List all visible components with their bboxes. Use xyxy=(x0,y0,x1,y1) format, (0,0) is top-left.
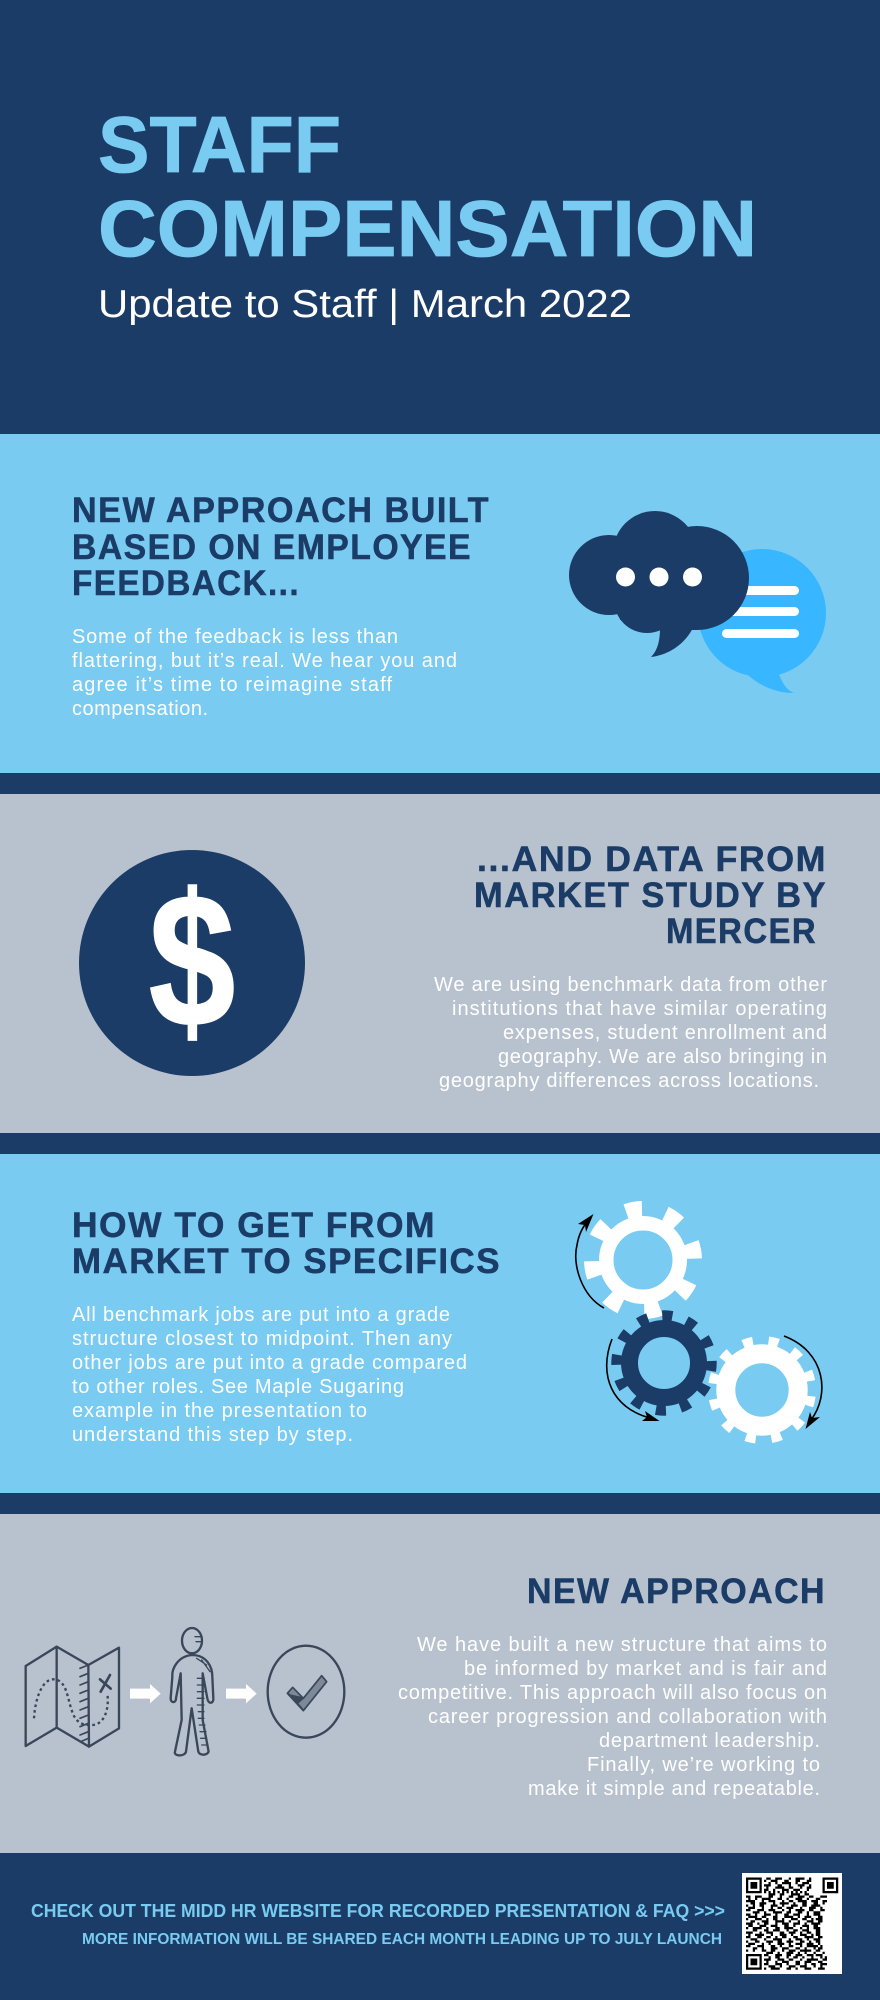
heading: new approach: NEW APPROACH xyxy=(527,1572,826,1611)
text block: new approach: career progression and collaboration with xyxy=(428,1706,827,1728)
subtitle: Update to Staff | March 2022 xyxy=(98,283,632,326)
dark cloud bubble xyxy=(569,511,749,657)
icon: person xyxy=(171,1628,213,1755)
icon: gears xyxy=(576,1195,822,1445)
text block: employee feedback: flattering, but it’s real. We hear you and xyxy=(72,650,457,672)
text block: new approach: department leadership. xyxy=(599,1730,820,1752)
text block: market data: expenses, student enrollment and xyxy=(503,1022,827,1044)
text block: market to specifics: All benchmark jobs are put into a grade xyxy=(72,1304,450,1326)
panel: new approach xyxy=(0,1514,880,1853)
text block: employee feedback: Some of the feedback is less than xyxy=(72,626,398,648)
header panel xyxy=(0,0,880,434)
title xyxy=(98,100,757,273)
title: STAFF xyxy=(98,100,341,189)
text block: market data xyxy=(434,974,827,1092)
heading: employee feedback: BASED ON EMPLOYEE xyxy=(72,528,472,567)
heading: employee feedback: NEW APPROACH BUILT xyxy=(72,491,490,530)
QR code xyxy=(742,1873,842,1974)
footer panel xyxy=(0,1853,880,2000)
text block: market data: geography. We are also bringing in xyxy=(498,1046,827,1068)
text block: employee feedback: compensation. xyxy=(72,698,208,720)
icon: dollar circle: $ xyxy=(149,854,235,1066)
heading: market to specifics xyxy=(72,1206,501,1281)
text block: market to specifics: structure closest to midpoint. Then any xyxy=(72,1328,452,1350)
rotation arrow: top gear xyxy=(576,1214,604,1308)
panel: employee feedback xyxy=(0,434,880,773)
light speech bubble xyxy=(698,549,826,693)
icon: check circle xyxy=(268,1646,344,1738)
rotation arrow: lower gear xyxy=(784,1336,822,1429)
footer call to action: CHECK OUT THE MIDD HR WEBSITE FOR RECORDED PRESENTATION & FAQ >>> xyxy=(31,1901,725,1921)
text block: new approach: Finally, we’re working to xyxy=(587,1754,820,1776)
text block: market data: institutions that have similar operating xyxy=(452,998,827,1020)
navy gear xyxy=(615,1314,713,1412)
footer note: MORE INFORMATION WILL BE SHARED EACH MONTH LEADING UP TO JULY LAUNCH xyxy=(82,1931,722,1948)
arrow: map to person xyxy=(130,1684,161,1703)
heading: market to specifics: HOW TO GET FROM xyxy=(72,1206,436,1245)
bubble text lines xyxy=(700,586,799,638)
heading: market data: MARKET STUDY BY xyxy=(474,876,827,915)
heading: market to specifics: MARKET TO SPECIFICS xyxy=(72,1242,501,1281)
heading: employee feedback xyxy=(72,491,490,603)
heading: market data: ...AND DATA FROM xyxy=(477,840,827,879)
text block: market data: We are using benchmark data from other xyxy=(434,974,827,996)
rotation arrow: navy gear xyxy=(607,1339,660,1421)
text block: market to specifics: example in the presentation to xyxy=(72,1400,367,1422)
text block: market to specifics xyxy=(72,1304,467,1446)
icon: map xyxy=(26,1647,119,1747)
icon: dollar circle xyxy=(79,850,305,1076)
text block: market to specifics: understand this step by step. xyxy=(72,1424,353,1446)
text block: new approach: competitive. This approach will also focus on xyxy=(398,1682,827,1704)
text block: new approach: We have built a new structure that aims to xyxy=(417,1634,827,1656)
text block: market to specifics: to other roles. See Maple Sugaring xyxy=(72,1376,404,1398)
text block: new approach xyxy=(398,1634,827,1800)
heading: market data: MERCER xyxy=(666,912,817,951)
title: COMPENSATION xyxy=(98,184,757,273)
icon row: map to person to check xyxy=(26,1628,344,1755)
text block: new approach: make it simple and repeatable. xyxy=(528,1778,820,1800)
panel: market data xyxy=(0,794,880,1133)
lower white gear xyxy=(707,1335,817,1445)
panel: market to specifics xyxy=(0,1154,880,1493)
text block: market data: geography differences across locations. xyxy=(439,1070,819,1092)
bubble dots xyxy=(616,568,702,586)
icon: speech bubbles xyxy=(569,511,826,693)
heading: market data xyxy=(474,840,827,951)
text block: employee feedback xyxy=(72,626,457,720)
heading: employee feedback: FEEDBACK... xyxy=(72,564,300,603)
text block: market to specifics: other jobs are put into a grade compared xyxy=(72,1352,467,1374)
text block: new approach: be informed by market and is fair and xyxy=(464,1658,827,1680)
text block: employee feedback: agree it’s time to reimagine staff xyxy=(72,674,392,696)
top white gear xyxy=(578,1195,708,1325)
arrow: person to check xyxy=(226,1684,257,1703)
